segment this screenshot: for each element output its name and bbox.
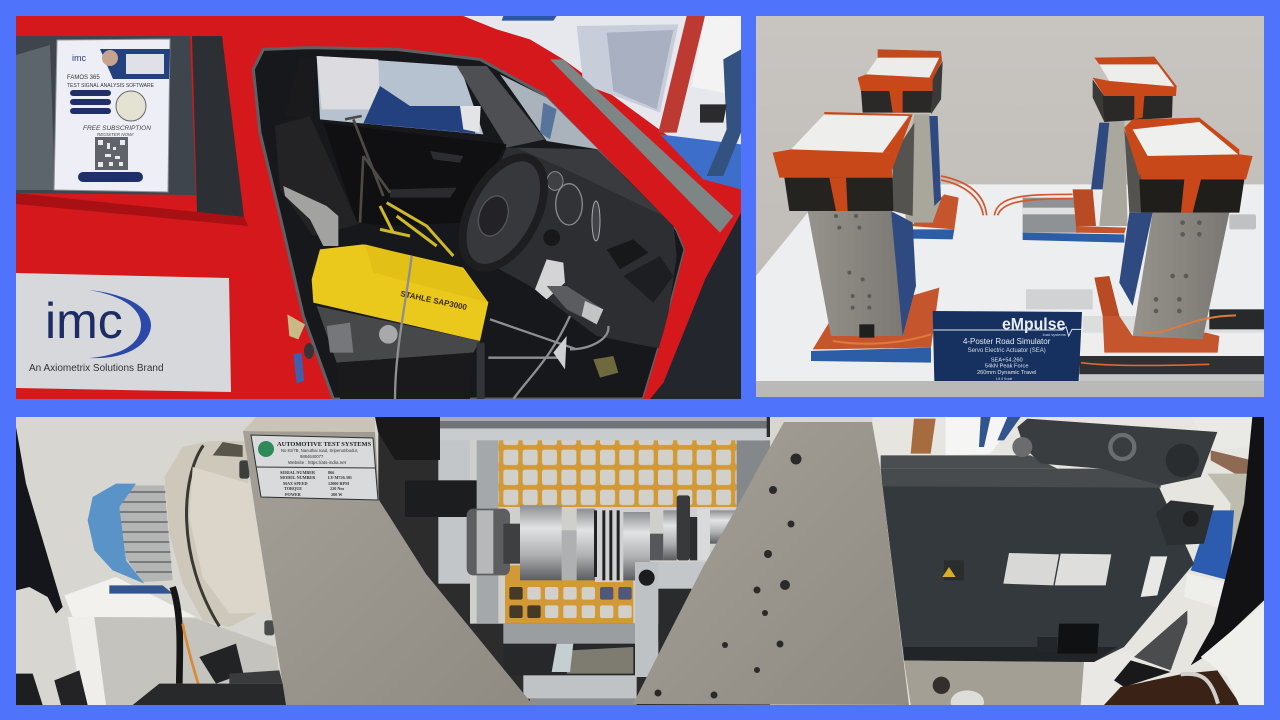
left half: motor, table and plate [16,427,286,705]
eMpulse placard: 260mm Dynamic Travel [977,370,1036,376]
warning label [944,560,964,580]
door interior [323,123,507,226]
aluminium frame joint [635,562,707,677]
motor body [882,485,1194,662]
mechanism below box [317,306,480,363]
red A pillar and door frame [544,59,706,399]
nameplate: Website : https://ats-india.net [288,460,347,465]
nameplate: No 81/7B, Nanuthai road, Sriperumbudur, [281,448,358,453]
nameplate: 200 W [331,492,343,497]
nameplate: 12000 RPM [328,481,349,486]
front right post [1094,118,1253,353]
cables [941,176,1073,215]
white table [64,577,196,617]
black rail parts [199,644,243,684]
grey actuator [535,259,565,299]
cables [173,587,180,684]
poster: FAMOS software with QR: FREE SUBSCRIPTION [83,125,151,132]
terminal box [1017,419,1217,485]
car door interior, traced in magnified coordinates: STAHLE SAP3000 [400,289,468,312]
poster: FAMOS software with QR: FAMOS 365 [67,75,100,81]
nameplate: 9884640077 [300,454,324,459]
logo sign: imc: An Axiometrix Solutions Brand [29,363,164,374]
poster: FAMOS software with QR: imc [72,53,86,63]
nameplate: 866 [328,470,334,475]
nameplate: AUTOMOTIVE TEST SYSTEMS [277,441,372,448]
eMpulse placard [933,311,1082,381]
poster: FAMOS software with QR [54,39,170,192]
dashboard [498,148,676,348]
coupling shaft [405,480,738,582]
cream housing top [243,417,375,432]
cable chain [1134,610,1187,670]
base plate [904,660,1086,705]
eMpulse placard: 54kN Peak Force [985,364,1029,370]
gauges [547,172,563,190]
black cloth [16,427,63,614]
panel: dynamometer test bench [16,417,1264,714]
steering wheel [460,154,548,268]
nameplate: MODEL NUMBER [280,475,316,480]
eMpulse placard: load systems [1043,332,1066,337]
rods and cables [395,256,608,399]
nameplate: 220 Nm [330,486,344,491]
eMpulse placard: eMpulse [1002,314,1065,333]
nameplate: SERIAL NUMBER [280,470,316,475]
nameplate: POWER [285,492,302,497]
blue sticker [293,353,304,383]
poster: FAMOS software with QR: TEST SIGNAL ANALYSIS SOFTWARE [67,83,155,89]
eMpulse placard: 1:8.8 Scale [996,377,1012,381]
door handle [287,314,305,339]
nameplate [251,435,378,500]
panel: red car with test equipment [16,16,741,399]
logo sign: imc: imc [45,293,123,349]
left gusset plate [243,431,533,705]
nameplate: LY-M726.301 [328,475,352,480]
interior A pillar and windscreen [457,66,545,148]
floor items [54,670,88,705]
logo sign: imc [16,273,231,392]
white table [756,184,1264,381]
inner door opening [253,48,685,399]
grey windscreen strip [550,59,733,233]
bench frame and orange perforated panel [378,417,770,705]
rating labels [1003,553,1059,585]
right gusset plate [633,422,909,705]
right door [650,213,741,399]
yellow arm rig [380,203,453,256]
car door interior, traced in magnified coordinates [253,16,741,399]
eMpulse placard: SEA+54.260 [991,357,1023,363]
dark gap behind plate [375,417,440,460]
seat [285,56,315,116]
left door window [16,36,248,226]
background right, people [872,417,1264,705]
yellow robot box [312,244,488,341]
panel: 4-poster road simulator [756,16,1264,397]
nameplate: TORQUE [284,486,302,491]
rear right post [1073,57,1177,233]
booth background seen beyond the windscreen [463,16,741,189]
poster: FAMOS software with QR: REGISTER NOW! [97,132,134,137]
side bracket [1156,500,1214,545]
window view [317,56,483,134]
eMpulse placard: 4-Poster Road Simulator [963,337,1051,346]
rear left post [858,49,959,239]
blue motor with fins [88,441,274,635]
front left post [773,112,939,363]
rails [1022,198,1264,332]
cable chain [1079,356,1264,374]
eMpulse placard: Servo Electric Actuator (SEA) [968,348,1046,354]
nameplate: MAX SPEED [283,481,308,486]
hand and sleeve [1104,670,1241,705]
right half: servo motor [881,419,1264,714]
